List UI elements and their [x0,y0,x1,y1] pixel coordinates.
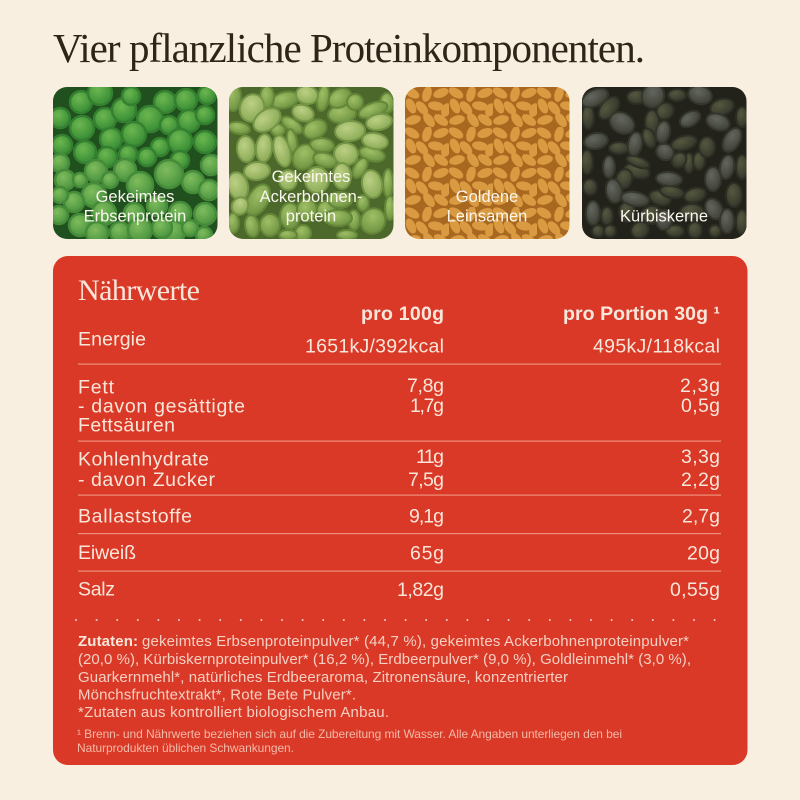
row: Fett: 2,3g [680,375,720,397]
row: Kohlenhydrate: - davon Zucker [78,469,216,491]
label: Erbsenprotein [84,208,186,226]
label: Kürbiskerne [620,208,708,226]
ingredients text: gekeimtes Erbsenproteinpulver* (44,7 %), gekeimtes Ackerbohnenproteinpulver* [142,633,689,650]
label: Gekeimtes [272,168,350,186]
row: Kohlenhydrate: 11g [416,446,444,468]
row: Ballaststoffe: 2,7g [682,506,720,528]
ingredients text [78,633,691,721]
row: Energie [78,329,720,358]
ingredients text: Zutaten: [78,633,138,650]
card: Gekeimtes Ackerbohnenprotein [225,83,395,241]
row: Energie: 495kJ/118kcal [593,336,720,358]
footnote marker: ¹ [714,303,720,325]
label: Ackerbohnen- [260,188,362,206]
row: Ballaststoffe [78,506,720,528]
row: Salz [78,579,720,601]
row: Ballaststoffe: Ballaststoffe [78,506,192,528]
row: Salz: Salz [78,579,115,601]
panel: Nährwerte [53,256,748,765]
ingredients text: Guarkernmehl*, natürliches Erdbeeraroma, Zitronensäure, konzentrierter [78,669,568,686]
ingredients text: *Zutaten aus kontrolliert biologischem Anbau. [78,704,389,721]
card: Goldene Leinsamen [405,87,570,239]
column heading: pro Portion 30g: pro Portion 30g [563,303,708,325]
row: Fett [78,375,720,437]
row: Eiweiß: 20g [687,542,720,564]
ingredients text: Mönchsfruchtextrakt*, Rote Bete Pulver*. [78,686,356,704]
row: Fett: Fettsäuren [78,415,175,437]
row: Eiweiß: Eiweiß [78,542,136,564]
row: Kohlenhydrate [78,446,720,491]
row: Eiweiß [78,542,720,564]
row: Fett: - davon gesättigte [78,396,245,418]
ingredients text: (20,0 %), Kürbiskernproteinpulver* (16,2 %), Erdbeerpulver* (9,0 %), Goldleinmehl* (3,0 %), [78,651,691,668]
row: Energie: 1651kJ/392kcal [305,336,444,358]
row: Kohlenhydrate: 2,2g [681,469,720,491]
label: Leinsamen [447,208,527,226]
row: Fett: 0,5g [681,395,720,417]
column heading: pro 100g: pro 100g [361,303,444,325]
label: protein [286,208,336,226]
row: Salz: 0,55g [670,579,720,601]
row: Kohlenhydrate: 7,5g [408,469,444,491]
card: Gekeimtes Erbsenprotein [53,87,218,239]
row: Fett: 7,8g [407,375,444,397]
row: Fett: Fett [78,377,115,399]
row: Kohlenhydrate: Kohlenhydrate [78,449,209,471]
title: Vier pflanzliche Proteinkomponenten. [53,25,645,71]
row: Ballaststoffe: 9,1g [409,506,444,528]
label: Goldene [456,188,518,206]
heading: Nährwerte: Nährwerte [78,274,200,307]
row: Eiweiß: 65g [410,542,444,564]
row: Fett: 1,7g [410,395,444,417]
row: Salz: 1,82g [397,579,444,601]
row: Kohlenhydrate: 3,3g [681,446,720,468]
footnote: ¹ Brenn- und Nährwerte beziehen sich auf die Zubereitung mit Wasser. Alle Angaben unterliegen den bei [77,727,622,741]
card: Kürbiskerne [579,80,748,241]
footnote [77,727,622,755]
footnote: Naturprodukten üblichen Schwankungen. [77,741,294,755]
label: Gekeimtes [96,188,174,206]
row: Energie: Energie [78,329,146,351]
